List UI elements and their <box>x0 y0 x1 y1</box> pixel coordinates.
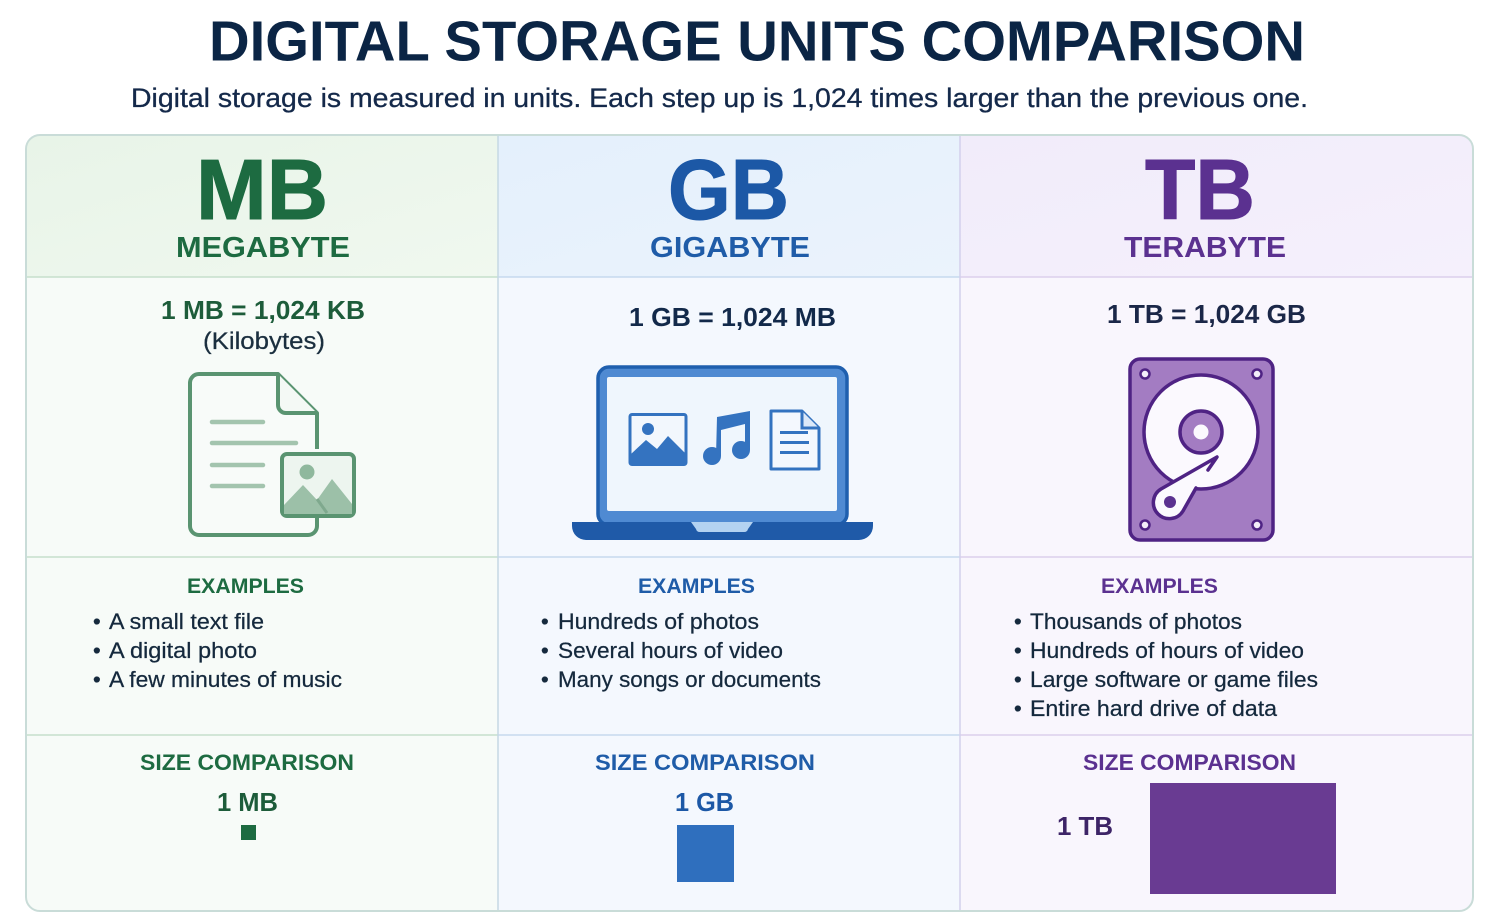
icon: hard drive <box>1130 359 1273 540</box>
heading: MEGABYTE: MEGABYTE <box>176 232 350 264</box>
examples list: Entire hard drive of data <box>1030 696 1278 721</box>
equation: 1 TB: 1 TB = 1,024 GB <box>1107 299 1306 329</box>
note: kilobytes: (Kilobytes) <box>203 328 325 355</box>
equation: 1 GB: 1 GB = 1,024 MB <box>629 302 836 332</box>
examples list: Many songs or documents <box>558 667 821 692</box>
size label: 1 TB <box>1057 811 1113 841</box>
examples list <box>93 609 342 692</box>
examples list: • <box>93 638 101 663</box>
examples list: A digital photo <box>109 638 257 663</box>
examples list: Hundreds of hours of video <box>1030 638 1304 663</box>
examples list: Large software or game files <box>1030 667 1318 692</box>
examples list: • <box>93 609 101 634</box>
examples list: • <box>541 609 549 634</box>
heading: GIGABYTE: GIGABYTE <box>650 232 810 264</box>
examples list <box>1014 609 1318 721</box>
title: DIGITAL STORAGE UNITS COMPARISON <box>209 10 1305 74</box>
heading: MB: MB <box>196 143 328 238</box>
size square: GB <box>677 825 734 882</box>
panel: megabyte <box>93 143 365 840</box>
examples heading: EXAMPLES <box>1101 575 1218 598</box>
size rectangle: TB <box>1150 783 1336 894</box>
examples list: • <box>541 667 549 692</box>
examples list: Thousands of photos <box>1030 609 1242 634</box>
examples list: A small text file <box>109 609 264 634</box>
examples list: • <box>93 667 101 692</box>
icon: laptop <box>572 367 873 540</box>
heading: GB: GB <box>668 143 789 238</box>
heading: TB: TB <box>1145 143 1255 238</box>
size comparison heading: SIZE COMPARISON <box>140 750 354 775</box>
icon: document with picture <box>190 374 354 535</box>
panel: terabyte <box>1014 143 1336 894</box>
examples list: • <box>1014 609 1022 634</box>
examples list: A few minutes of music <box>109 667 342 692</box>
examples list: Several hours of video <box>558 638 783 663</box>
size comparison heading: SIZE COMPARISON <box>595 750 815 775</box>
examples list: • <box>1014 696 1022 721</box>
examples heading: EXAMPLES <box>187 575 304 598</box>
size comparison heading: SIZE COMPARISON <box>1083 750 1296 775</box>
subtitle: Digital storage is measured in units. Each step up is 1,024 times larger than the previous one. <box>131 83 1308 113</box>
examples list: • <box>1014 667 1022 692</box>
panel: gigabyte <box>541 143 873 882</box>
size square: MB <box>241 825 256 840</box>
size label: 1 MB <box>217 787 278 817</box>
examples list <box>541 609 821 692</box>
size label: 1 GB <box>675 787 734 817</box>
examples list: • <box>541 638 549 663</box>
examples list: • <box>1014 638 1022 663</box>
examples heading: EXAMPLES <box>638 575 755 598</box>
examples list: Hundreds of photos <box>558 609 759 634</box>
equation: 1 MB: 1 MB = 1,024 KB <box>161 295 365 325</box>
heading: TERABYTE: TERABYTE <box>1124 232 1286 264</box>
